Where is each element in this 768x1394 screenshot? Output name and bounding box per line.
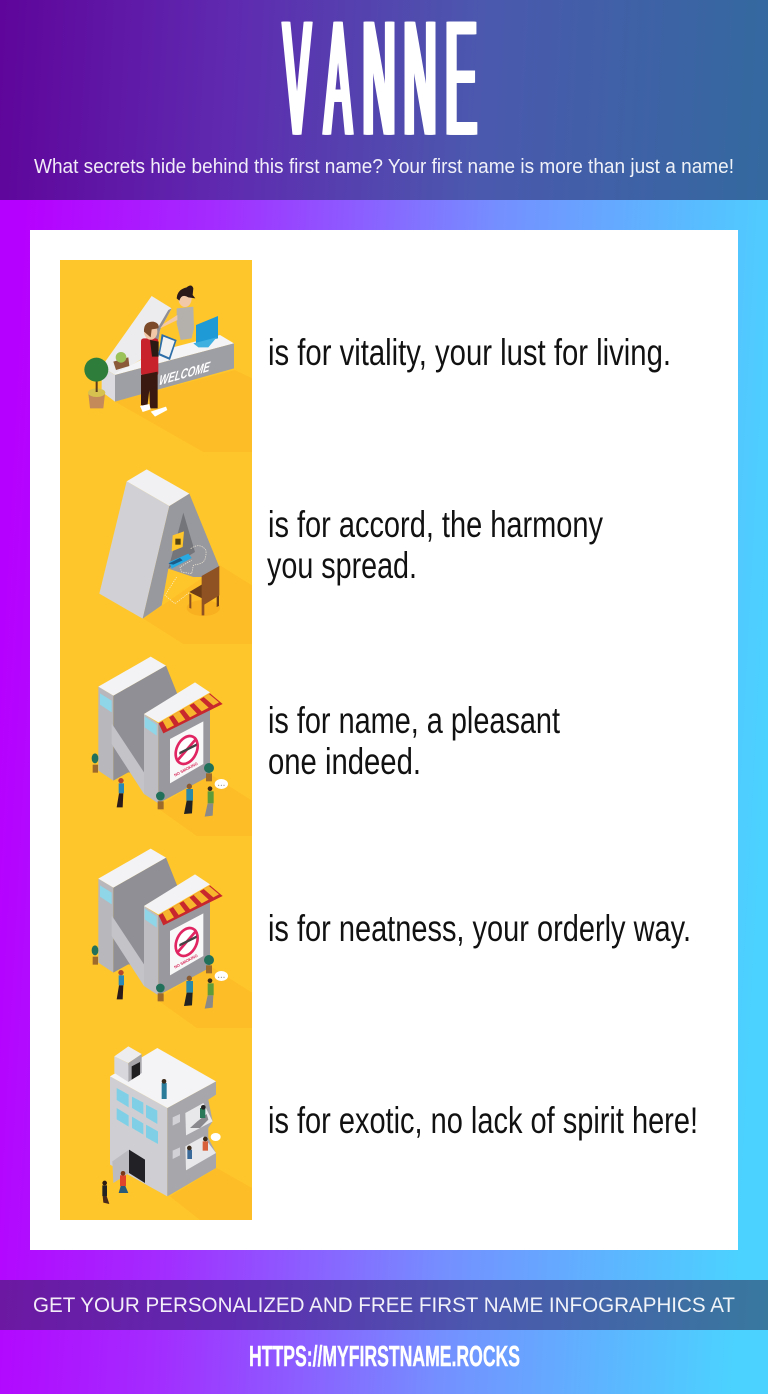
footer url: HTTPS://MYFIRSTNAME.ROCKS [249,1341,520,1373]
subtitle: What secrets hide behind this first name? Your first name is more than just a name! [34,156,734,178]
title [281,0,478,171]
illustration: reception desk letter V [84,286,252,452]
text: first N lines [268,700,561,782]
illustration: letter E building [102,1046,252,1220]
illustration: first letter N building [92,657,252,836]
text: V line: is for vitality, your lust for living. [268,332,671,373]
illustration: letter A building [99,469,252,644]
text: A lines: you spread. [267,545,417,586]
illustration: reception desk letter V: WELCOME [158,358,211,388]
main white card [30,230,738,1250]
footer band [0,1280,768,1330]
text: first N lines: is for name, a pleasant [268,700,561,741]
header band [0,0,768,200]
text: first N lines: one indeed. [268,741,421,782]
text: A lines: is for accord, the harmony [268,504,603,545]
text: A lines [267,504,603,586]
yellow illustration strip [60,260,252,1220]
illustration: second letter N building [92,849,252,1028]
footer band: GET YOUR PERSONALIZED AND FREE FIRST NAME INFOGRAPHICS AT [33,1294,735,1317]
